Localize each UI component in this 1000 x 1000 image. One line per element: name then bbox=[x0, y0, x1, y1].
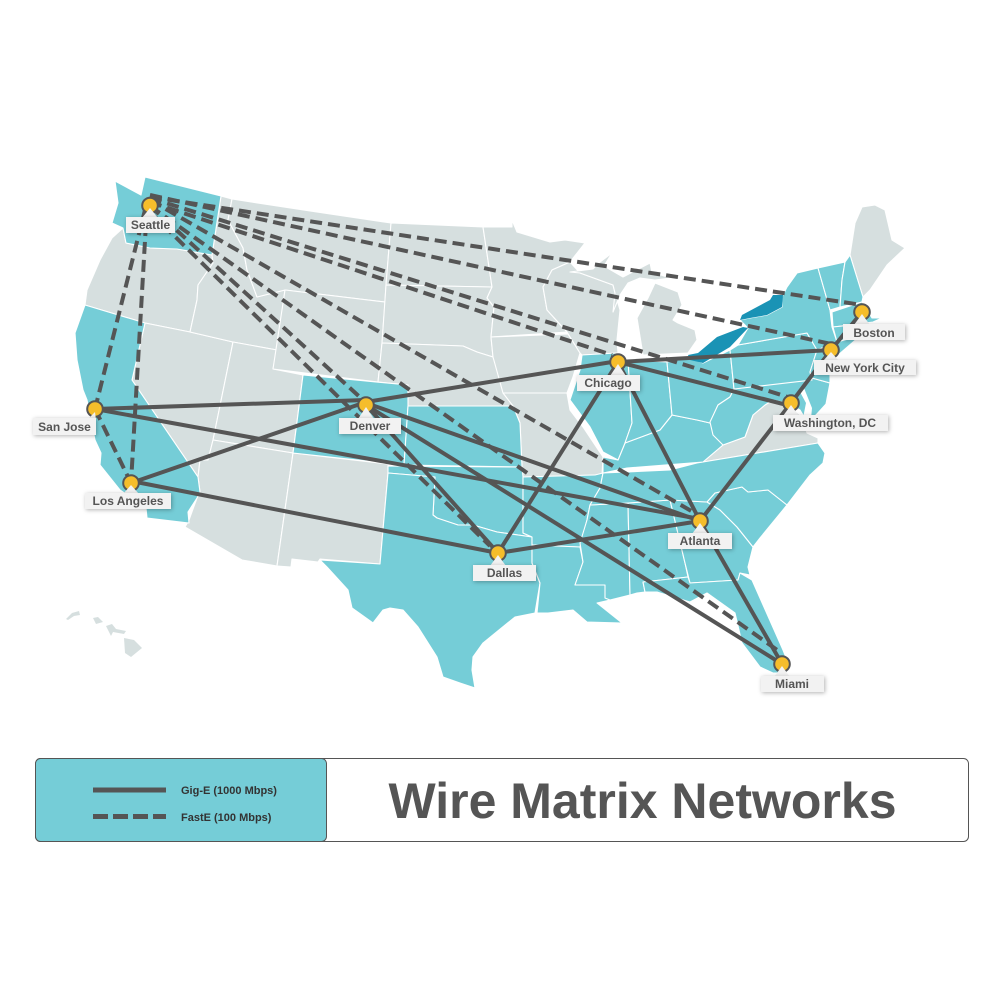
Gig-E links bbox=[95, 312, 862, 664]
Hawaii bbox=[66, 611, 142, 657]
city: San Jose bbox=[33, 401, 103, 435]
city: Dallas: Dallas bbox=[487, 566, 523, 580]
Lake Erie bbox=[688, 327, 748, 363]
city: Denver bbox=[339, 397, 401, 434]
city: Dallas bbox=[473, 545, 536, 581]
city: Los Angeles: Los Angeles bbox=[93, 494, 164, 508]
city: Miami: Miami bbox=[775, 677, 809, 691]
title bar bbox=[36, 758, 968, 842]
city: Seattle: Seattle bbox=[131, 218, 170, 232]
map of the United States bbox=[66, 177, 905, 688]
city: Seattle bbox=[126, 198, 175, 233]
Lake Ontario bbox=[740, 295, 783, 320]
city: Boston: Boston bbox=[853, 326, 895, 340]
city: Denver: Denver bbox=[350, 419, 391, 433]
city: Los Angeles bbox=[85, 475, 171, 509]
city: Chicago: Chicago bbox=[584, 376, 632, 390]
city: Washington, DC bbox=[773, 395, 888, 431]
city: Chicago bbox=[577, 354, 640, 391]
city: Atlanta bbox=[668, 513, 732, 549]
city: Miami bbox=[761, 656, 824, 692]
Chesapeake Bay bbox=[800, 388, 812, 430]
city: Boston bbox=[843, 304, 905, 340]
teal states bbox=[75, 177, 882, 688]
title: Wire Matrix Networks bbox=[388, 773, 897, 829]
legend: FastE: FastE (100 Mbps) bbox=[181, 812, 272, 824]
city: Atlanta: Atlanta bbox=[680, 534, 721, 548]
city: New York City: New York City bbox=[825, 361, 905, 375]
legend panel bbox=[36, 758, 326, 842]
grey states bbox=[85, 196, 905, 567]
legend: Gig-E: Gig-E (1000 Mbps) bbox=[181, 785, 277, 797]
city: Washington, DC: Washington, DC bbox=[784, 416, 876, 430]
FastE links from Seattle bbox=[95, 195, 862, 652]
city: San Jose: San Jose bbox=[38, 420, 91, 434]
city: New York City bbox=[814, 342, 916, 375]
